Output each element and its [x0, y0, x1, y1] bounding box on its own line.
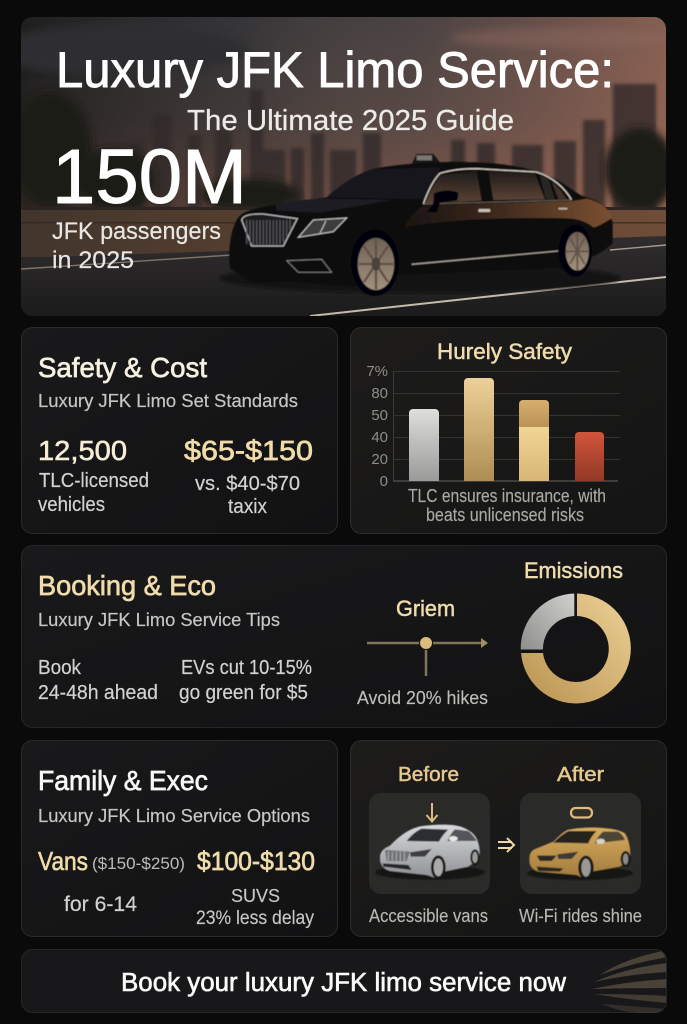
panel: hero: [0, 17, 676, 316]
bar chart: 50: [371, 407, 388, 424]
heading: Safety & Cost: [38, 352, 207, 383]
limousine illustration: [220, 154, 620, 296]
suvs option: $100-$130: [197, 846, 315, 876]
suvs option: SUVS: [231, 885, 280, 906]
vans option: ($150-$250): [92, 855, 185, 873]
bar chart: 20: [371, 451, 388, 468]
after tile: gold car: [520, 793, 641, 894]
chart caption: [408, 486, 606, 525]
before tile: silver car: [369, 793, 490, 894]
eco tip: go green for $5: [179, 682, 308, 704]
timeline caption: Avoid 20% hikes: [357, 687, 488, 708]
bar chart: 80: [371, 385, 388, 402]
panel: call to action: [22, 950, 668, 1013]
before caption: Accessible vans: [369, 906, 488, 926]
donut title: Emissions: [524, 558, 623, 583]
bar chart: 40: [371, 429, 388, 446]
stat: price range: vs. $40-$70: [195, 473, 300, 495]
timeline label: Griem: [396, 596, 455, 621]
panel: booking and eco: [22, 546, 666, 728]
heading: Family & Exec: [38, 765, 208, 796]
bar chart: 0: [380, 473, 388, 490]
stat: price range: [184, 435, 313, 518]
subheading: Luxury JFK Limo Service Tips: [38, 609, 280, 630]
heading: Booking & Eco: [38, 570, 216, 601]
subheading: Luxury JFK Limo Service Options: [38, 805, 310, 826]
booking tip: [38, 657, 158, 704]
icon: pill: [571, 808, 592, 818]
stat: 150M: 150M: [52, 134, 247, 220]
vans option: [38, 846, 185, 916]
chart caption: beats unlicensed risks: [426, 505, 584, 525]
panel: before and after: [350, 740, 666, 936]
subtitle: The Ultimate 2025 Guide: [187, 105, 514, 137]
decorative wing: [592, 950, 668, 1013]
chart title: Hurely Safety: [437, 339, 573, 364]
panel: safety and cost: [22, 328, 338, 534]
timeline diagram with arrow: [367, 637, 488, 676]
eco tip: [179, 657, 312, 704]
eco tip: EVs cut 10-15%: [181, 657, 312, 679]
bar chart: [366, 363, 620, 490]
panel: safety bar chart: [350, 328, 666, 534]
suvs option: 23% less delay: [196, 908, 314, 929]
vans option: for 6-14: [64, 893, 137, 916]
stat caption: in 2025: [52, 247, 134, 274]
before label: Before: [398, 763, 459, 786]
icon: down arrow: [426, 803, 438, 822]
donut chart: [521, 594, 631, 703]
after caption: Wi-Fi rides shine: [519, 906, 642, 926]
stat: licensed vehicles: 12,500: [38, 435, 127, 466]
arrow: before to after: [498, 838, 514, 852]
suvs option: [196, 846, 315, 929]
stat: price range: taxix: [228, 496, 267, 518]
chart caption: TLC ensures insurance, with: [408, 486, 606, 506]
stat: price range: $65-$150: [184, 435, 313, 466]
subheading: Luxury JFK Limo Set Standards: [38, 390, 298, 411]
bar chart: 7%: [366, 363, 388, 380]
stat: licensed vehicles: TLC-licensed: [39, 470, 149, 492]
call to action text: Book your luxury JFK limo service now: [121, 969, 567, 997]
booking tip: Book: [38, 657, 82, 679]
hero background: dusk skyline and road: [0, 17, 676, 316]
title: Luxury JFK Limo Service:: [56, 42, 614, 98]
booking tip: 24-48h ahead: [38, 682, 158, 704]
stat caption: JFK passengers: [52, 218, 221, 245]
panel: family and exec: [22, 740, 338, 936]
vans option: Vans: [38, 846, 88, 876]
after label: After: [557, 763, 604, 786]
stat caption: [52, 218, 221, 274]
stat: licensed vehicles: [38, 435, 149, 516]
stat: licensed vehicles: vehicles: [38, 494, 105, 516]
